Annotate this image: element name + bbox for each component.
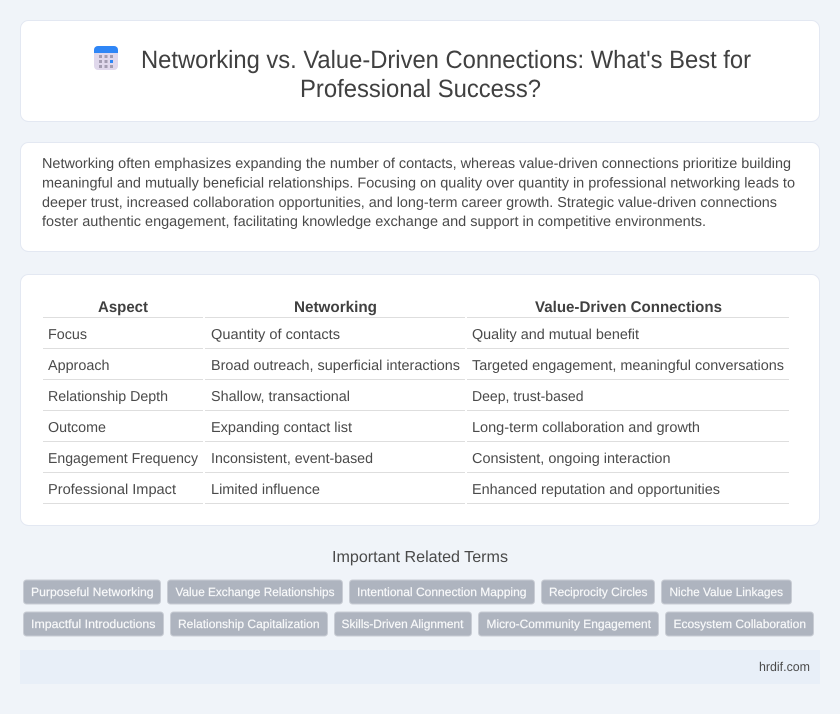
row: Engagement Frequency: Consistent, ongoing interaction <box>472 451 670 467</box>
row: Relationship Depth: Shallow, transactional <box>211 389 350 405</box>
row: Relationship Depth <box>48 389 584 405</box>
title <box>141 46 751 103</box>
tag: Purposeful Networking: Purposeful Networking <box>31 585 154 599</box>
table header row <box>98 299 722 316</box>
row: Focus: Quality and mutual benefit <box>472 327 639 343</box>
tag: Value Exchange Relationships <box>168 580 342 604</box>
tag: Relationship Capitalization <box>170 612 328 636</box>
tag: Niche Value Linkages <box>662 580 792 604</box>
footer bar <box>20 650 820 684</box>
summary paragraph: deeper trust, increased collaboration opportunities, and long-term career growth. Strategic value-driven connections <box>42 195 777 211</box>
row: Professional Impact: Professional Impact <box>48 482 176 498</box>
tag: Value Exchange Relationships: Value Exchange Relationships <box>176 585 334 599</box>
row: Professional Impact: Limited influence <box>211 482 320 498</box>
tag: Micro-Community Engagement: Micro-Community Engagement <box>486 617 652 631</box>
row: Engagement Frequency: Engagement Frequency <box>48 451 199 467</box>
tag: Ecosystem Collaboration <box>666 612 814 636</box>
row: Focus <box>48 327 639 343</box>
tag cloud <box>24 580 814 636</box>
row: Focus: Quantity of contacts <box>211 327 340 343</box>
table header row: Value-Driven Connections <box>535 299 722 316</box>
row: Engagement Frequency: Inconsistent, event-based <box>211 451 373 467</box>
tag: Intentional Connection Mapping <box>350 580 534 604</box>
row: Relationship Depth: Relationship Depth <box>48 389 168 405</box>
row: Professional Impact: Enhanced reputation and opportunities <box>472 482 720 498</box>
tag: Skills-Driven Alignment: Skills-Driven Alignment <box>342 617 464 631</box>
tag: Impactful Introductions <box>24 612 164 636</box>
summary paragraph <box>42 156 795 230</box>
summary paragraph: Networking often emphasizes expanding the number of contacts, whereas value-driven connections prioritize building <box>42 156 791 172</box>
title: Professional Success? <box>300 75 541 103</box>
tag: Purposeful Networking <box>24 580 160 604</box>
table header row: Networking <box>294 299 377 316</box>
row: Approach: Targeted engagement, meaningful conversations <box>472 358 784 374</box>
panel: comparison table <box>20 274 820 526</box>
row: Engagement Frequency <box>48 451 670 467</box>
row: Outcome: Expanding contact list <box>211 420 352 436</box>
tag: Impactful Introductions: Impactful Introductions <box>31 617 156 631</box>
panel: summary text <box>20 142 820 252</box>
tag: Relationship Capitalization: Relationship Capitalization <box>178 617 320 631</box>
heading: Important Related Terms: Important Related Terms <box>332 549 508 566</box>
tag: Niche Value Linkages: Niche Value Linkages <box>670 585 783 599</box>
title: Networking vs. Value-Driven Connections: What's Best for <box>141 46 751 74</box>
row: Focus: Focus <box>48 327 87 343</box>
table header row: Aspect <box>98 299 148 316</box>
row: Outcome: Outcome <box>48 420 106 436</box>
row: Relationship Depth: Deep, trust-based <box>472 389 584 405</box>
tag: Micro-Community Engagement <box>478 612 658 636</box>
tag: Intentional Connection Mapping: Intentional Connection Mapping <box>357 585 526 599</box>
row: Outcome: Long-term collaboration and growth <box>472 420 700 436</box>
tag: Reciprocity Circles <box>542 580 654 604</box>
row: Approach <box>48 358 784 374</box>
row: Approach: Approach <box>48 358 110 374</box>
summary paragraph: foster authentic engagement, facilitating knowledge exchange and support in competitive environments. <box>42 214 706 230</box>
summary paragraph: meaningful and mutually beneficial relationships. Focusing on quality over quantity in professional networking leads to <box>42 176 795 192</box>
tag: Skills-Driven Alignment <box>334 612 472 636</box>
header panel <box>20 20 820 122</box>
tag: Reciprocity Circles: Reciprocity Circles <box>549 585 648 599</box>
icon: calendar <box>94 46 118 70</box>
footer source: hrdif.com <box>759 659 810 674</box>
row: Outcome <box>48 420 700 436</box>
tag: Ecosystem Collaboration: Ecosystem Collaboration <box>674 617 806 631</box>
row: Approach: Broad outreach, superficial interactions <box>211 358 460 374</box>
row: Professional Impact <box>48 482 720 498</box>
